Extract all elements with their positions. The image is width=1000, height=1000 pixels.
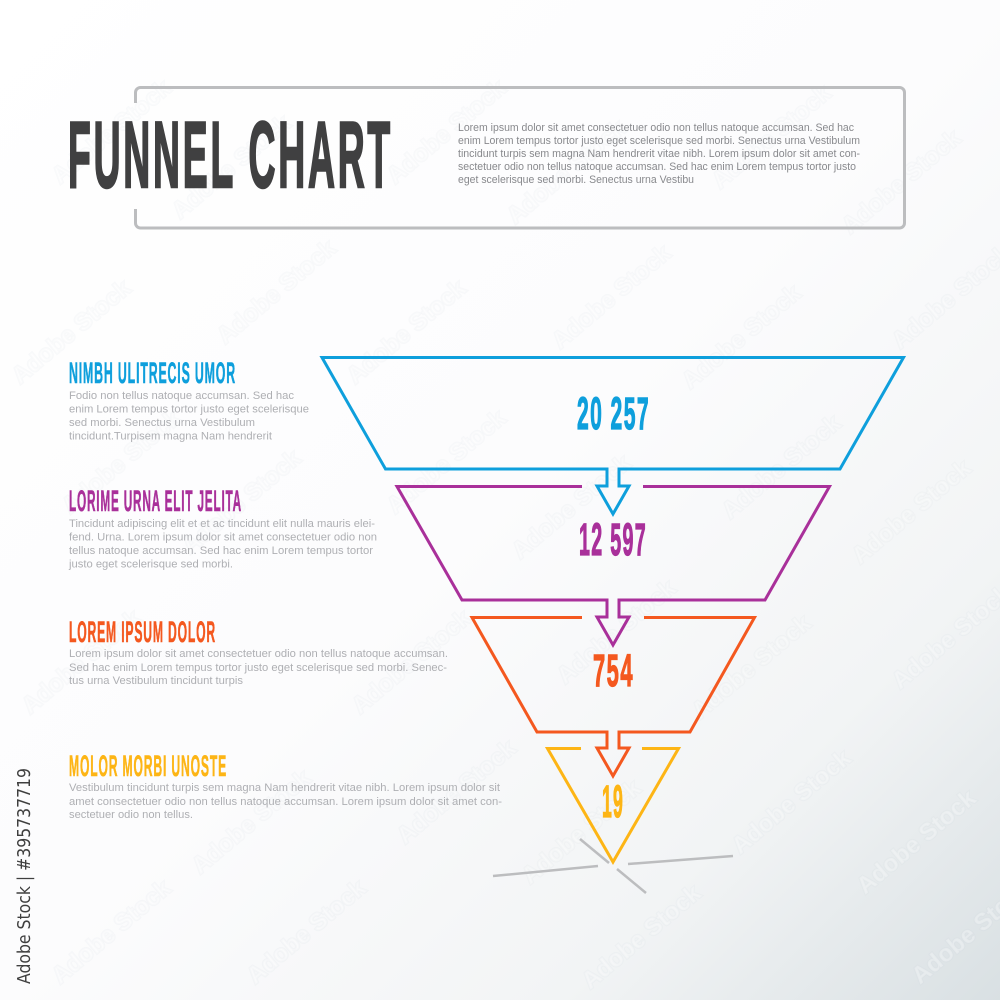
text block 2: tellus natoque accumsan. Sed hac enim Lorem tempus tortor [69,545,373,557]
text block 3: tus urna Vestibulum tincidunt turpis [69,675,244,687]
text: Adobe Stock [7,274,137,390]
text block 4: amet consectetuer odio non tellus natoque accumsan. Lorem ipsum dolor sit amet con- [69,796,502,808]
text: Adobe Stock [707,79,837,195]
funnel chart: 19 [602,776,624,827]
text: Adobe Stock [727,744,857,860]
funnel segment 1: blue with arrow [322,358,904,514]
text: Adobe Stock [502,114,632,230]
text: Adobe Stock [382,404,512,520]
intro text block: enim Lorem tempus tortor justo eget scelerisque sed morbi. Senectus urna Vestibulum [458,135,860,147]
funnel tip grey lines [493,839,733,893]
text block 4: Vestibulum tincidunt turpis sem magna Nam hendrerit vitae nibh. Lorem ipsum dolor sit [69,782,500,794]
text block 3: Sed hac enim Lorem tempus tortor justo eget scelerisque sed morbi. Senec- [69,662,447,674]
text: Adobe Stock [47,74,177,190]
text: FUNNEL CHART [68,102,393,207]
funnel chart: 12 597 [579,514,647,565]
text block 1: Fodio non tellus natoque accumsan. Sed hac [69,390,294,402]
text: Adobe Stock [17,604,147,720]
text block 1 [69,390,309,442]
intro text block: eget scelerisque sed morbi. Senectus urna Vestibu [458,174,694,186]
text block 2 [68,518,377,570]
text: Adobe Stock [847,454,977,570]
text block 2: justo eget scelerisque sed morbi. [68,558,233,570]
intro text block [458,122,860,186]
section 2: heading and text: LORIME URNA ELIT JELITA [69,485,242,518]
text: Adobe Stock [547,239,677,355]
text block 3 [69,648,448,687]
text block 1: sed morbi. Senectus urna Vestibulum [69,417,255,429]
text block 2: fend. Urna. Lorem ipsum dolor sit amet consectetuer odio non [69,532,377,544]
intro text block: sectetuer odio non tellus natoque accumsan. Sed hac enim Lorem tempus tortor justo [458,161,856,173]
text: Adobe Stock [382,74,512,190]
text: Adobe Stock [837,124,967,240]
text: Adobe Stock [677,279,807,395]
text block 1: enim Lorem tempus tortor justo eget scelerisque [69,404,309,416]
text: Adobe Stock [577,879,707,995]
funnel segment 3: orange with arrow [472,618,754,776]
text: Adobe Stock [47,874,177,990]
text: Adobe Stock [717,409,847,525]
text: Adobe Stock [517,774,647,890]
text: Adobe Stock [852,784,982,900]
section 3: heading and text [69,616,448,687]
funnel segment 2: purple with arrow [397,486,830,645]
header frame [136,88,904,228]
text: Adobe Stock [212,234,342,350]
text: Adobe Stock [687,609,817,725]
funnel chart: 754 [593,645,634,696]
section 2: heading and text [68,485,377,570]
text block 4 [69,782,502,821]
intro text block: tincidunt turpis sem magna Nam hendrerit vitae nibh. Lorem ipsum dolor sit amet con- [458,148,860,160]
text: Adobe Stock [342,274,472,390]
text: Adobe Stock [167,109,297,225]
text: Adobe Stock [57,404,187,520]
text block 2: Tincidunt adipiscing elit et et ac tincidunt elit nulla mauris elei- [69,518,375,530]
intro text block: Lorem ipsum dolor sit amet consectetuer odio non tellus natoque accumsan. Sed hac [458,122,854,134]
vertical stock id stamp: Adobe Stock | #395737719 [14,768,35,984]
section 4: heading and text [69,750,502,821]
text block 1: tincidunt.Turpisem magna Nam hendrerit [69,430,272,442]
section 1: heading and text: NIMBH ULITRECIS UMOR [69,357,236,390]
text: Adobe Stock [392,734,522,850]
text: Adobe Stock [187,764,317,880]
text block 4: sectetuer odio non tellus. [69,809,193,821]
text: Adobe Stock [177,444,307,560]
funnel chart: 20 257 [577,388,650,439]
section 3: heading and text: LOREM IPSUM DOLOR [69,616,216,649]
text: Adobe Stock [347,604,477,720]
section 1: heading and text [69,357,309,442]
text block 3: Lorem ipsum dolor sit amet consectetuer odio non tellus natoque accumsan. [69,648,448,660]
section 4: heading and text: MOLOR MORBI UNOSTE [69,750,227,783]
funnel segment 4: yellow triangle [548,748,678,862]
funnel chart [322,358,904,862]
text: Adobe Stock [552,574,682,690]
text: Adobe Stock [242,874,372,990]
text: Adobe Stock [507,449,637,565]
